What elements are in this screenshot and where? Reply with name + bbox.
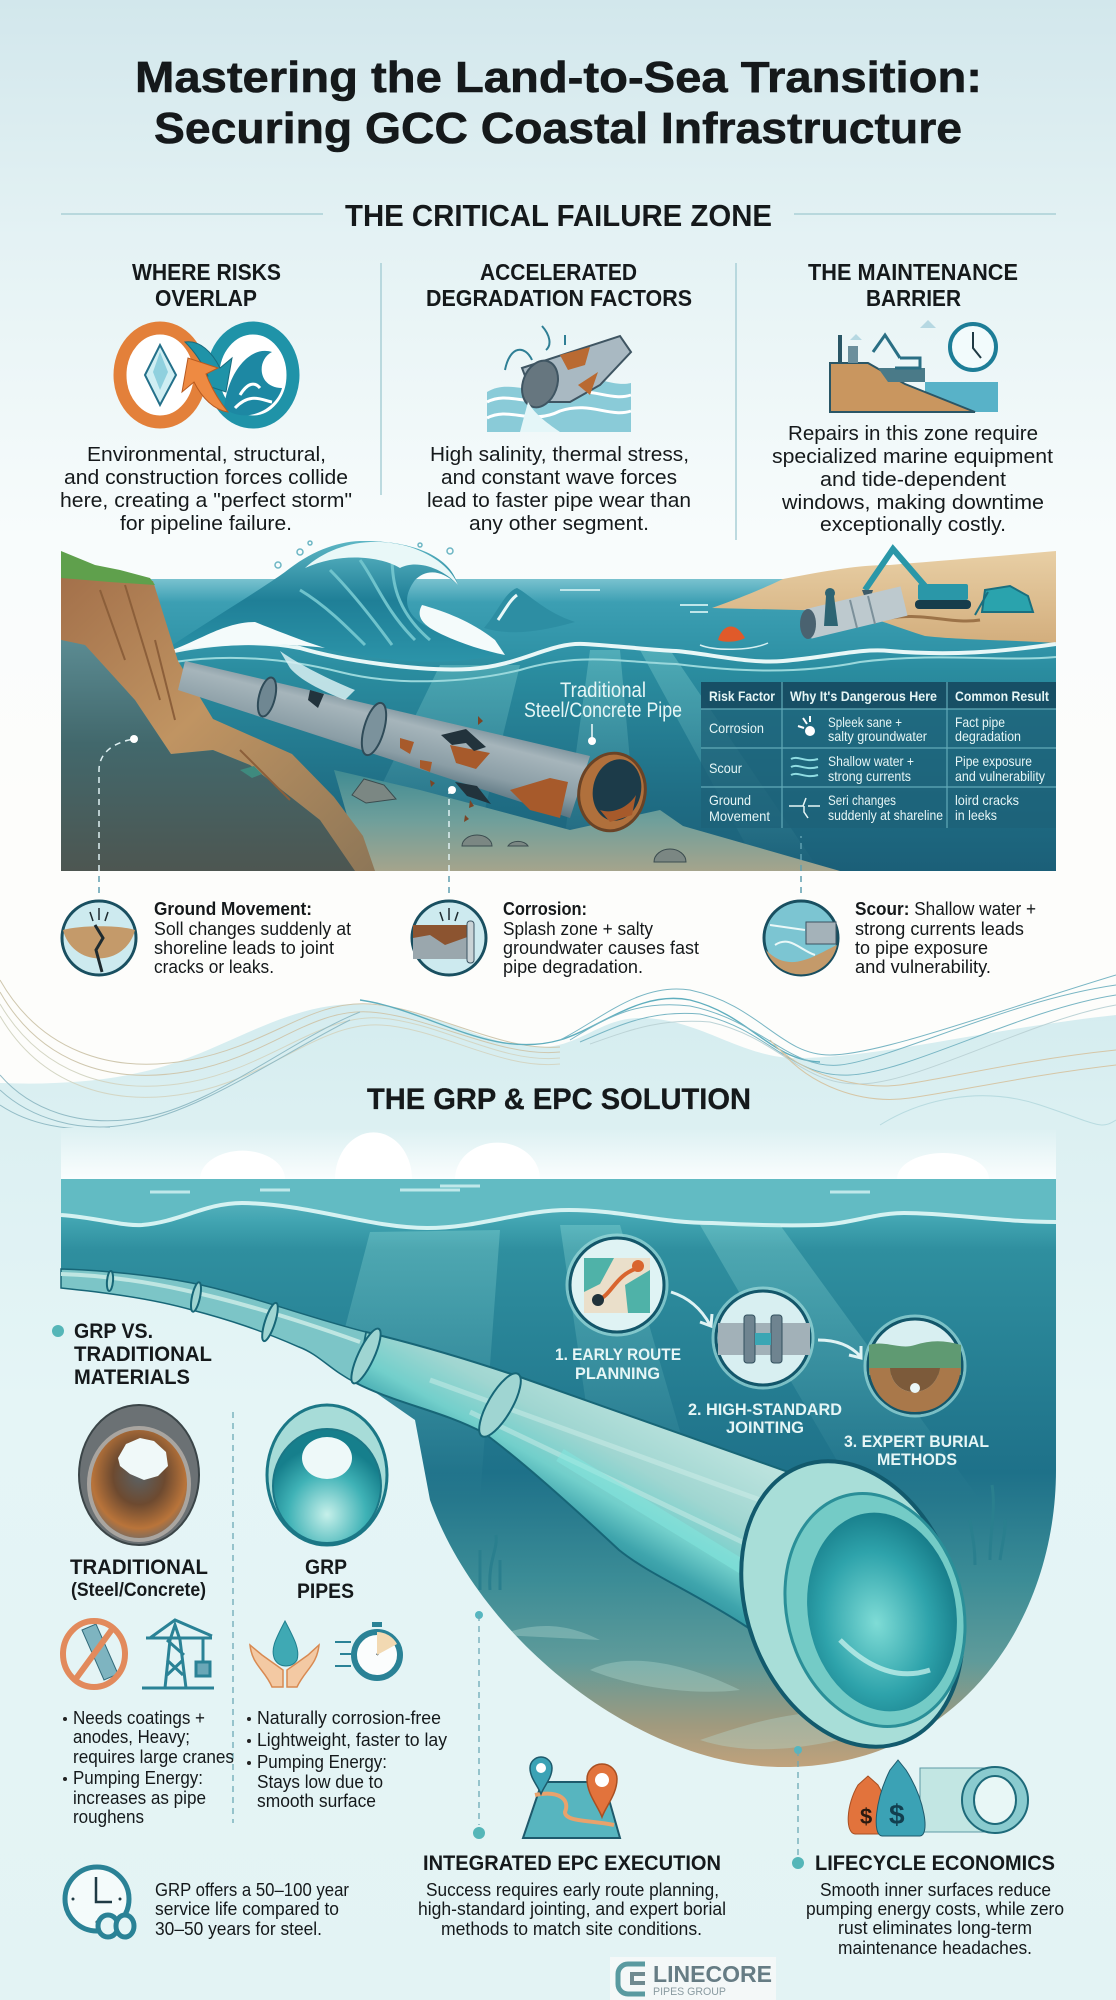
list: traditional: anodes, Heavy; — [73, 1726, 190, 1747]
table row: ground movement: Seri changes — [828, 792, 896, 808]
GRP pipeline — [61, 1269, 1001, 1778]
table row: scour: and vulnerability — [955, 768, 1045, 784]
table header: Why It's Dangerous Here — [790, 688, 937, 704]
step 2: high-standard jointing — [688, 1288, 842, 1437]
arrow: step 1 to 2 — [671, 1292, 712, 1326]
callout: corrosion — [412, 898, 699, 977]
text: ground movement: cracks or leaks. — [154, 956, 274, 977]
list: traditional — [63, 1707, 234, 1827]
sea — [61, 579, 1056, 871]
text block: the maintenance barrier — [772, 422, 1053, 536]
text: integrated EPC execution: Success requires early route planning, — [426, 1879, 719, 1900]
text: integrated EPC execution — [418, 1879, 726, 1939]
table row: ground movement: Ground — [709, 792, 751, 808]
table row: scour: Pipe exposure — [955, 753, 1032, 769]
icon: scour under pipe — [764, 901, 838, 975]
table row: corrosion: salty groundwater — [828, 728, 927, 744]
text block: where risks overlap: Environmental, structural, — [87, 443, 326, 466]
text block: where risks overlap: for pipeline failure. — [120, 512, 292, 535]
table row: corrosion — [709, 714, 1021, 744]
heading: traditional — [70, 1556, 208, 1601]
text block: where risks overlap: and construction forces collide — [64, 466, 348, 489]
text: scour: and vulnerability. — [855, 956, 991, 977]
table row: scour — [709, 753, 1045, 784]
list: traditional: requires large cranes — [73, 1746, 234, 1767]
heading: GRP pipes — [297, 1556, 354, 1603]
step 3: expert burial methods: 3. EXPERT BURIAL — [844, 1432, 989, 1451]
icon: shoreline excavator and clock — [830, 320, 998, 412]
text: integrated EPC execution: methods to match site conditions. — [441, 1918, 702, 1939]
text block: accelerated degradation factors: any other segment. — [469, 512, 649, 535]
list: traditional: Pumping Energy: — [73, 1767, 203, 1788]
table: risk factors — [701, 682, 1056, 828]
rocks — [352, 779, 686, 862]
cliff — [61, 551, 375, 871]
icon: stopwatch — [335, 1622, 400, 1678]
heading: the maintenance barrier — [808, 259, 1018, 311]
text: corrosion: pipe degradation. — [503, 956, 643, 977]
label: traditional steel/concrete pipe: Steel/Concrete Pipe — [524, 699, 682, 722]
text block: accelerated degradation factors: High salinity, thermal stress, — [430, 443, 689, 466]
worker — [824, 588, 838, 626]
leader: lifecycle economics — [792, 1750, 804, 1869]
text: scour: to pipe exposure — [855, 937, 988, 958]
loader — [975, 586, 1033, 615]
list: GRP pipes: Lightweight, faster to lay — [257, 1729, 448, 1750]
table row: ground movement: Movement — [709, 808, 770, 824]
icon: clock with infinity — [65, 1867, 134, 1937]
heading: the critical failure zone: THE CRITICAL FAILURE ZONE — [345, 198, 772, 233]
text block: accelerated degradation factors: and constant wave forces — [441, 466, 677, 489]
text: ground movement: Ground Movement: — [154, 898, 312, 919]
text block: accelerated degradation factors: lead to faster pipe wear than — [427, 489, 691, 512]
text: scour — [855, 898, 1036, 977]
text: corrosion: Corrosion: — [503, 898, 587, 919]
text block: where risks overlap — [60, 443, 352, 535]
table row: corrosion: degradation — [955, 728, 1021, 744]
text: corrosion — [503, 898, 699, 977]
text: corrosion: groundwater causes fast — [503, 937, 699, 958]
callout: scour — [764, 898, 1036, 977]
panel: accelerated degradation factors — [426, 259, 692, 535]
heading: GRP vs traditional materials: MATERIALS — [74, 1366, 190, 1389]
table row: corrosion: Fact pipe — [955, 714, 1005, 730]
pipe joints — [106, 1271, 528, 1442]
text block: the maintenance barrier: and tide-dependent — [820, 468, 1006, 491]
heading: accelerated degradation factors: ACCELERATED — [480, 259, 637, 285]
heading: GRP pipes: GRP — [305, 1556, 347, 1579]
text: ground movement — [154, 898, 351, 977]
step 1: early route planning — [555, 1235, 681, 1383]
step 1: early route planning: 1. EARLY ROUTE — [555, 1345, 681, 1364]
icon: ground crack — [62, 901, 136, 975]
buoy — [718, 626, 745, 642]
icon: no coatings — [63, 1621, 125, 1687]
icon: corroded traditional pipe — [79, 1405, 199, 1545]
text: lifecycle economics: maintenance headaches. — [838, 1937, 1032, 1958]
column: traditional — [63, 1556, 234, 1827]
column: GRP pipes — [247, 1556, 448, 1811]
text: lifecycle economics: Smooth inner surfaces reduce — [820, 1879, 1051, 1900]
logo: Linecore Pipes Group: PIPES GROUP — [653, 1986, 726, 1998]
text: corrosion: Splash zone + salty — [503, 918, 654, 939]
heading: GRP vs traditional materials — [52, 1320, 212, 1389]
table row: scour: strong currents — [828, 768, 911, 784]
list: traditional: roughens — [73, 1806, 144, 1827]
table header: Common Result — [955, 688, 1049, 704]
text: ground movement: Soll changes suddenly at — [154, 918, 351, 939]
text: service life: GRP offers a 50–100 year — [155, 1879, 349, 1900]
text: lifecycle economics: rust eliminates long-term — [838, 1917, 1032, 1938]
icon: corroding pipe in waves — [487, 326, 631, 432]
wave divider — [0, 1004, 1116, 2000]
callout: ground movement — [62, 898, 351, 977]
illustration: coastal failure cross-section — [61, 541, 1056, 871]
title — [135, 53, 982, 153]
text block: the maintenance barrier: specialized marine equipment — [772, 445, 1053, 468]
heading: GRP pipes: PIPES — [297, 1580, 354, 1603]
step 1: early route planning: PLANNING — [575, 1364, 660, 1383]
icon: hands holding water drop — [250, 1621, 319, 1687]
text: lifecycle economics: pumping energy costs, while zero — [806, 1898, 1064, 1919]
panel: integrated EPC execution — [418, 1757, 726, 1939]
text: service life: service life compared to — [155, 1898, 339, 1919]
heading: where risks overlap: OVERLAP — [155, 285, 257, 311]
light rays — [384, 650, 701, 824]
sand shore with machinery — [712, 549, 1056, 643]
step 2: high-standard jointing: 2. HIGH-STANDARD — [688, 1400, 842, 1419]
excavator — [862, 549, 971, 609]
table row: ground movement: suddenly at shareline — [828, 807, 943, 823]
pipe mouth — [703, 1430, 1001, 1778]
text: service life: 30–50 years for steel. — [155, 1918, 322, 1939]
list: traditional: increases as pipe — [73, 1787, 206, 1808]
text block: the maintenance barrier: exceptionally costly. — [820, 513, 1006, 536]
heading: where risks overlap: WHERE RISKS — [132, 259, 281, 285]
panel: where risks overlap — [60, 259, 352, 535]
text: integrated EPC execution: high-standard jointing, and expert borial — [418, 1898, 726, 1919]
leader: integrated EPC — [473, 1615, 485, 1839]
text: ground movement: shoreline leads to joint — [154, 937, 334, 958]
heading: accelerated degradation factors: DEGRADATION FACTORS — [426, 285, 692, 311]
steps: installation process — [555, 1235, 989, 1469]
title: Mastering the Land-to-Sea Transition: — [135, 53, 982, 102]
label: traditional steel/concrete pipe: Traditional — [560, 679, 646, 702]
heading: accelerated degradation factors — [426, 259, 692, 311]
step 3: expert burial methods — [844, 1316, 989, 1469]
list: traditional: Needs coatings + — [73, 1707, 205, 1728]
panel: GRP vs traditional materials — [52, 1320, 448, 1827]
table header: Risk Factor — [709, 688, 775, 704]
pipe being laid — [800, 596, 904, 639]
heading: the maintenance barrier: THE MAINTENANCE — [808, 259, 1018, 285]
text: lifecycle economics — [806, 1879, 1064, 1958]
icon: corroded pipe — [412, 901, 486, 975]
icon: smooth GRP pipe — [267, 1405, 387, 1545]
text block: where risks overlap: here, creating a "perfect storm" — [60, 489, 352, 512]
callout: service life — [65, 1867, 349, 1939]
icon: crane — [142, 1620, 214, 1688]
heading: the maintenance barrier: BARRIER — [866, 285, 961, 311]
table row: corrosion: Corrosion — [709, 720, 764, 736]
heading: integrated EPC execution: INTEGRATED EPC EXECUTION — [423, 1852, 721, 1875]
sky and clouds — [61, 1128, 1056, 1180]
icon: infinity of risks — [120, 328, 293, 422]
title: Securing GCC Coastal Infrastructure — [154, 104, 962, 153]
list: GRP pipes: Naturally corrosion-free — [257, 1707, 441, 1728]
step 3: expert burial methods: METHODS — [877, 1450, 957, 1469]
table row: ground movement — [709, 792, 1019, 824]
table row: ground movement: loird cracks — [955, 792, 1019, 808]
heading: the GRP & EPC solution: THE GRP & EPC SOLUTION — [367, 1083, 751, 1116]
list: GRP pipes: Pumping Energy: — [257, 1751, 387, 1772]
logo: Linecore Pipes Group: LINECORE — [653, 1961, 772, 1987]
icon: route map with pins — [523, 1757, 620, 1838]
text block: the maintenance barrier: Repairs in this zone require — [788, 422, 1038, 445]
text block: accelerated degradation factors — [427, 443, 691, 535]
table row: ground movement: in leeks — [955, 807, 997, 823]
small markers — [475, 1611, 483, 1619]
text: scour: strong currents leads — [855, 918, 1024, 939]
list: GRP pipes — [247, 1707, 448, 1811]
text block: the maintenance barrier: windows, making downtime — [781, 491, 1044, 514]
step 2: high-standard jointing: JOINTING — [726, 1418, 804, 1437]
callout leaders — [99, 739, 801, 893]
arrow: step 2 to 3 — [818, 1340, 861, 1358]
table header — [709, 688, 1049, 704]
table row: corrosion: Spleek sane + — [828, 714, 902, 730]
panel: the maintenance barrier — [772, 259, 1053, 536]
traditional pipe, corroded — [178, 651, 652, 837]
table row: scour: Scour — [709, 760, 742, 776]
illustration: GRP pipeline under sea — [61, 1128, 1056, 1778]
seabed — [334, 770, 840, 871]
heading: GRP vs traditional materials: GRP VS. — [74, 1320, 153, 1343]
text: service life — [155, 1879, 349, 1939]
icon: money bags and pipe — [848, 1760, 1028, 1836]
surface line — [174, 643, 1056, 669]
panel: lifecycle economics — [806, 1760, 1064, 1958]
heading: where risks overlap — [132, 259, 281, 311]
heading: GRP vs traditional materials: TRADITIONAL — [74, 1343, 212, 1366]
heading: traditional: TRADITIONAL — [70, 1556, 208, 1579]
icon: money bags and pipe: $ — [889, 1799, 905, 1830]
heading: lifecycle economics: LIFECYCLE ECONOMICS — [815, 1852, 1055, 1875]
logo: Linecore Pipes Group — [610, 1957, 776, 2000]
water — [61, 1179, 1056, 1767]
breaking wave — [165, 541, 575, 662]
list: GRP pipes: smooth surface — [257, 1790, 376, 1811]
heading: traditional: (Steel/Concrete) — [71, 1580, 206, 1601]
label: traditional steel/concrete pipe — [524, 679, 682, 745]
list: GRP pipes: Stays low due to — [257, 1771, 383, 1792]
icon: money bags and pipe: $ — [860, 1804, 872, 1829]
table row: scour: Shallow water + — [828, 753, 914, 769]
text: scour: Scour: Shallow water + — [855, 898, 1036, 919]
